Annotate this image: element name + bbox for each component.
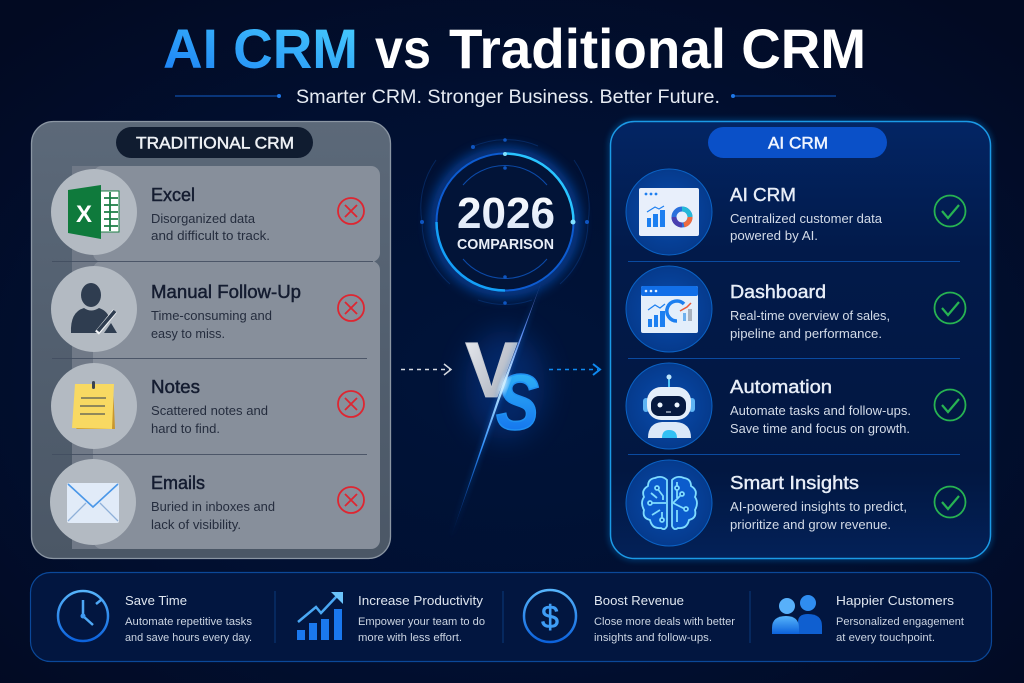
benefit: save time: Automate repetitive tasks xyxy=(125,616,253,628)
heading: AI CRM: AI CRM xyxy=(768,134,828,152)
row: Smart Insights: Smart Insights xyxy=(730,473,859,493)
heading: traditional CRM xyxy=(116,127,313,158)
benefit: increase productivity: Increase Productivity xyxy=(358,593,484,608)
badge: 2026 comparison: COMPARISON xyxy=(457,236,554,253)
benefit: boost revenue: Close more deals with better xyxy=(594,616,735,628)
row: AI CRM xyxy=(626,169,966,255)
subtitle xyxy=(175,87,836,108)
badge: 2026 comparison: 2026 xyxy=(457,189,555,238)
row: Automation xyxy=(626,363,966,449)
title: Traditional CRM xyxy=(449,17,866,80)
row: Notes xyxy=(51,363,364,449)
icon: check xyxy=(934,292,966,324)
benefit: increase productivity: more with less effort. xyxy=(358,632,462,644)
row: Automation: Automation xyxy=(730,377,832,397)
icon: CRM window xyxy=(639,188,699,236)
benefit: increase productivity xyxy=(297,592,485,644)
row: Manual Follow-Up: Manual Follow-Up xyxy=(151,282,301,302)
benefit: save time: and save hours every day. xyxy=(125,632,252,644)
arrow: VS to AI xyxy=(549,364,600,375)
row: Excel xyxy=(51,169,364,255)
icon: check xyxy=(934,486,966,518)
row: Notes: hard to find. xyxy=(151,421,220,436)
icon: cross xyxy=(338,391,364,417)
row: Smart Insights xyxy=(626,460,966,546)
icon: people xyxy=(772,595,822,634)
icon: Excel: X xyxy=(76,201,92,228)
benefit: boost revenue: insights and follow-ups. xyxy=(594,632,712,644)
icon: robot xyxy=(643,374,695,438)
row: Emails: Emails xyxy=(151,473,205,493)
badge: 2026 comparison xyxy=(420,138,589,305)
row: Dashboard: Dashboard xyxy=(730,282,826,302)
row: Manual Follow-Up: easy to miss. xyxy=(151,326,225,341)
row: Emails: Buried in inboxes and xyxy=(151,499,275,514)
subtitle: Smarter CRM. Stronger Business. Better Future. xyxy=(296,87,720,108)
title: vs xyxy=(375,17,431,80)
icon: cross xyxy=(338,198,364,224)
icon: dashboard window xyxy=(641,286,698,333)
row: Smart Insights: AI-powered insights to predict, xyxy=(730,499,907,514)
benefit: increase productivity: Empower your team to do xyxy=(358,616,485,628)
icon: check xyxy=(934,390,966,420)
row: AI CRM: AI CRM xyxy=(730,185,796,205)
icon: clock xyxy=(58,591,108,641)
row: Dashboard xyxy=(626,266,966,352)
row: Automation: Save time and focus on growth. xyxy=(730,421,910,436)
benefit: save time: Save Time xyxy=(125,593,187,608)
row: Notes: Notes xyxy=(151,377,200,397)
icon: check xyxy=(934,196,966,226)
title: AI CRM xyxy=(163,17,358,80)
benefit: happier customers: at every touchpoint. xyxy=(836,632,935,644)
row: Manual Follow-Up xyxy=(51,266,364,352)
VS with lightning slash: V xyxy=(465,325,518,414)
row: Automation: Automate tasks and follow-ups. xyxy=(730,403,911,418)
title xyxy=(163,17,866,80)
icon: Excel xyxy=(68,185,119,239)
row: Emails xyxy=(50,459,364,545)
VS with lightning slash xyxy=(450,283,545,540)
heading: AI CRM xyxy=(708,127,887,158)
icon: cross xyxy=(338,295,364,321)
VS with lightning slash: S xyxy=(496,357,539,446)
benefit: save time xyxy=(58,591,253,644)
row: Emails: lack of visibility. xyxy=(151,517,241,532)
row: Dashboard: Real-time overview of sales, xyxy=(730,308,890,323)
benefit: happier customers xyxy=(772,593,964,644)
benefit: happier customers: Personalized engagement xyxy=(836,616,964,628)
row: Excel: Disorganized data xyxy=(151,211,256,226)
icon: sticky note xyxy=(72,381,115,429)
panel: traditional CRM xyxy=(32,122,390,558)
icon: cross xyxy=(338,487,364,513)
benefit: happier customers: Happier Customers xyxy=(836,593,955,608)
row: Excel: and difficult to track. xyxy=(151,228,270,243)
icon: brain circuit xyxy=(642,477,697,529)
row: Excel: Excel xyxy=(151,185,195,205)
heading: traditional CRM: TRADITIONAL CRM xyxy=(136,134,294,152)
icon: dollar xyxy=(524,590,576,642)
icon: person writing xyxy=(71,283,117,333)
row: Notes: Scattered notes and xyxy=(151,403,268,418)
panel: AI CRM xyxy=(610,122,990,558)
benefit: boost revenue xyxy=(524,590,735,644)
benefit: boost revenue: Boost Revenue xyxy=(594,593,684,608)
icon: dollar: $ xyxy=(541,599,559,635)
row: Manual Follow-Up: Time-consuming and xyxy=(151,308,272,323)
row: AI CRM: Centralized customer data xyxy=(730,211,883,226)
panel: benefits xyxy=(30,572,992,662)
icon: envelope xyxy=(67,483,119,523)
row: Smart Insights: prioritize and grow revenue. xyxy=(730,517,891,532)
row: Dashboard: pipeline and performance. xyxy=(730,326,882,341)
icon: growth chart xyxy=(297,592,343,640)
row: AI CRM: powered by AI. xyxy=(730,228,818,243)
arrow: traditional to VS xyxy=(401,364,451,375)
